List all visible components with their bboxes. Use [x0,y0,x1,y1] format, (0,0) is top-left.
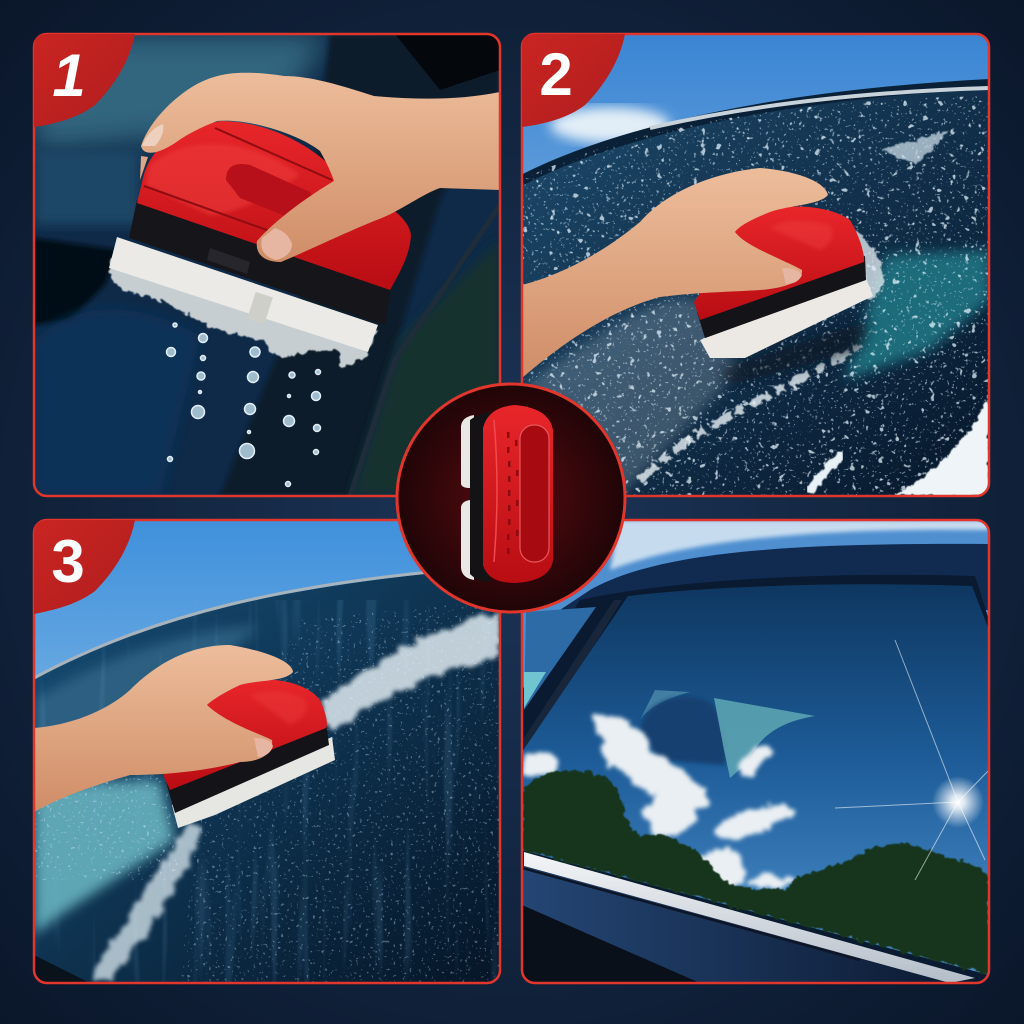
center medallion: tool side view [397,384,625,612]
badge 1 [34,34,135,127]
door body [523,866,919,982]
panel 3: scrubbing the windshield [34,520,500,983]
panel 4: clean window result [522,520,989,983]
badge 3 [34,520,135,614]
hand gripping tool [140,73,500,262]
chrome trim [524,852,975,983]
cloud reflections [522,707,797,892]
badge 2: 2 [539,41,573,108]
badge 2 [522,34,625,127]
tool: red scrubber [694,206,873,358]
water droplets [166,323,320,486]
cabin reflection [640,690,815,778]
hand on tool [34,645,293,812]
lower door shadow [522,905,700,983]
tool: red scrubber [109,121,411,367]
trees reflection [522,770,989,975]
badge 3: 3 [51,528,85,595]
tool: red scrubber [163,679,335,828]
panel 1: wet tool held above glass [34,34,500,496]
badge 1: 1 [52,42,86,109]
panel 2: applying foam to glass [522,34,990,496]
hand on tool [522,168,828,378]
sun glare [835,640,989,880]
